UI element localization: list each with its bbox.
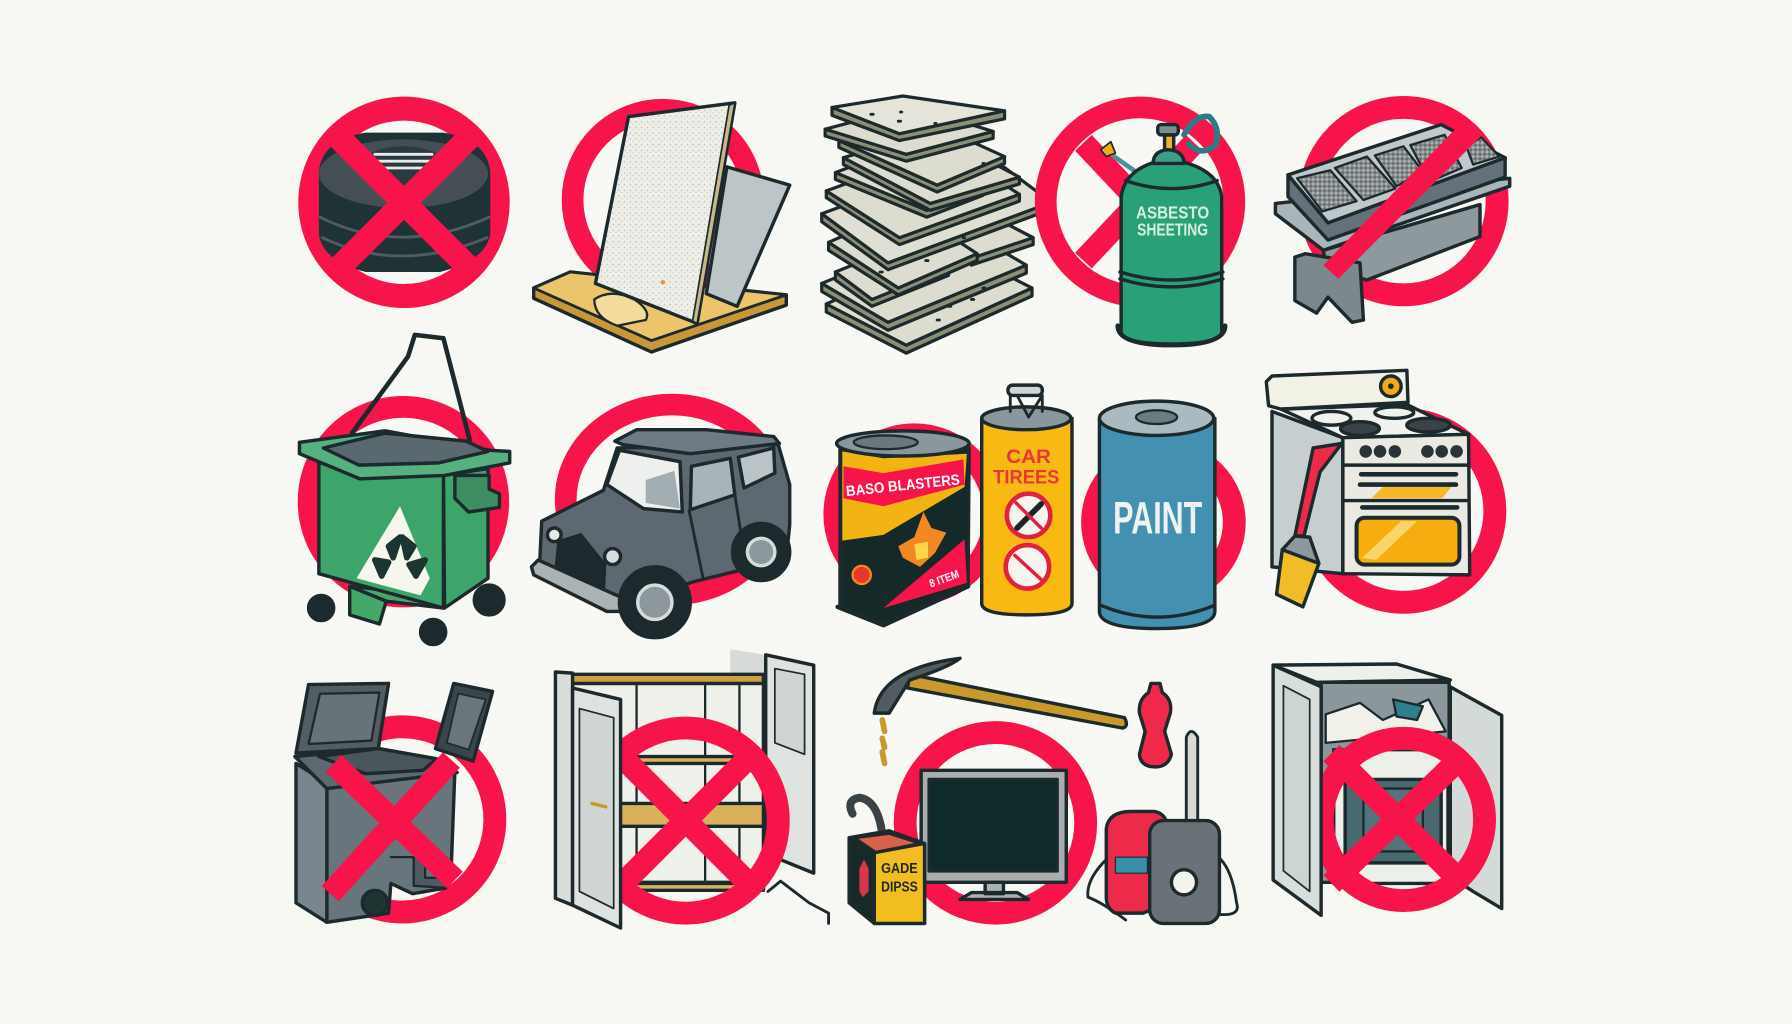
icon: prohibited car — [531, 405, 790, 638]
icon: prohibited gas cylinder — [1046, 107, 1234, 345]
icon: prohibited green wheelie bin — [299, 335, 510, 645]
icon: prohibited oven and brush — [1266, 370, 1495, 607]
icon: prohibited concrete blocks — [1275, 107, 1510, 322]
box with hose — [849, 798, 925, 923]
can text: TIREES — [993, 466, 1059, 488]
icon: prohibited grey cabinet — [1273, 664, 1502, 915]
can: paint — [1099, 401, 1215, 629]
label: asbestos sheeting — [1136, 202, 1209, 239]
label: asbestos sheeting: SHEETING — [1137, 219, 1208, 239]
hammer — [874, 658, 1126, 763]
icon: prohibited board — [534, 103, 790, 352]
jerry cans and rod — [1088, 731, 1237, 923]
can text: CAR — [1006, 446, 1051, 468]
icon: stack of asbestos sheets — [822, 96, 1051, 353]
icon: prohibited tyres — [310, 109, 498, 296]
paint label: PAINT — [1113, 493, 1202, 544]
icon: prohibited grey bin — [295, 683, 495, 922]
can text — [845, 472, 961, 590]
can text: BASO BLASTERS — [845, 472, 961, 500]
can text: 8 ITEM — [928, 569, 961, 590]
can: car tyres yellow — [982, 385, 1072, 615]
monitor — [921, 770, 1066, 899]
icon: prohibited open cabinet — [555, 649, 829, 928]
icon: prohibited fuel and paint cans — [834, 385, 1234, 629]
box text: DIPSS — [881, 879, 918, 895]
can: blasters tin — [837, 431, 969, 625]
box text: GADE — [881, 861, 918, 877]
box text — [881, 861, 918, 895]
bottle — [1139, 683, 1171, 767]
label: asbestos sheeting: ASBESTO — [1136, 202, 1209, 222]
can text — [993, 446, 1059, 488]
icon: prohibited monitor and tools — [849, 658, 1237, 923]
